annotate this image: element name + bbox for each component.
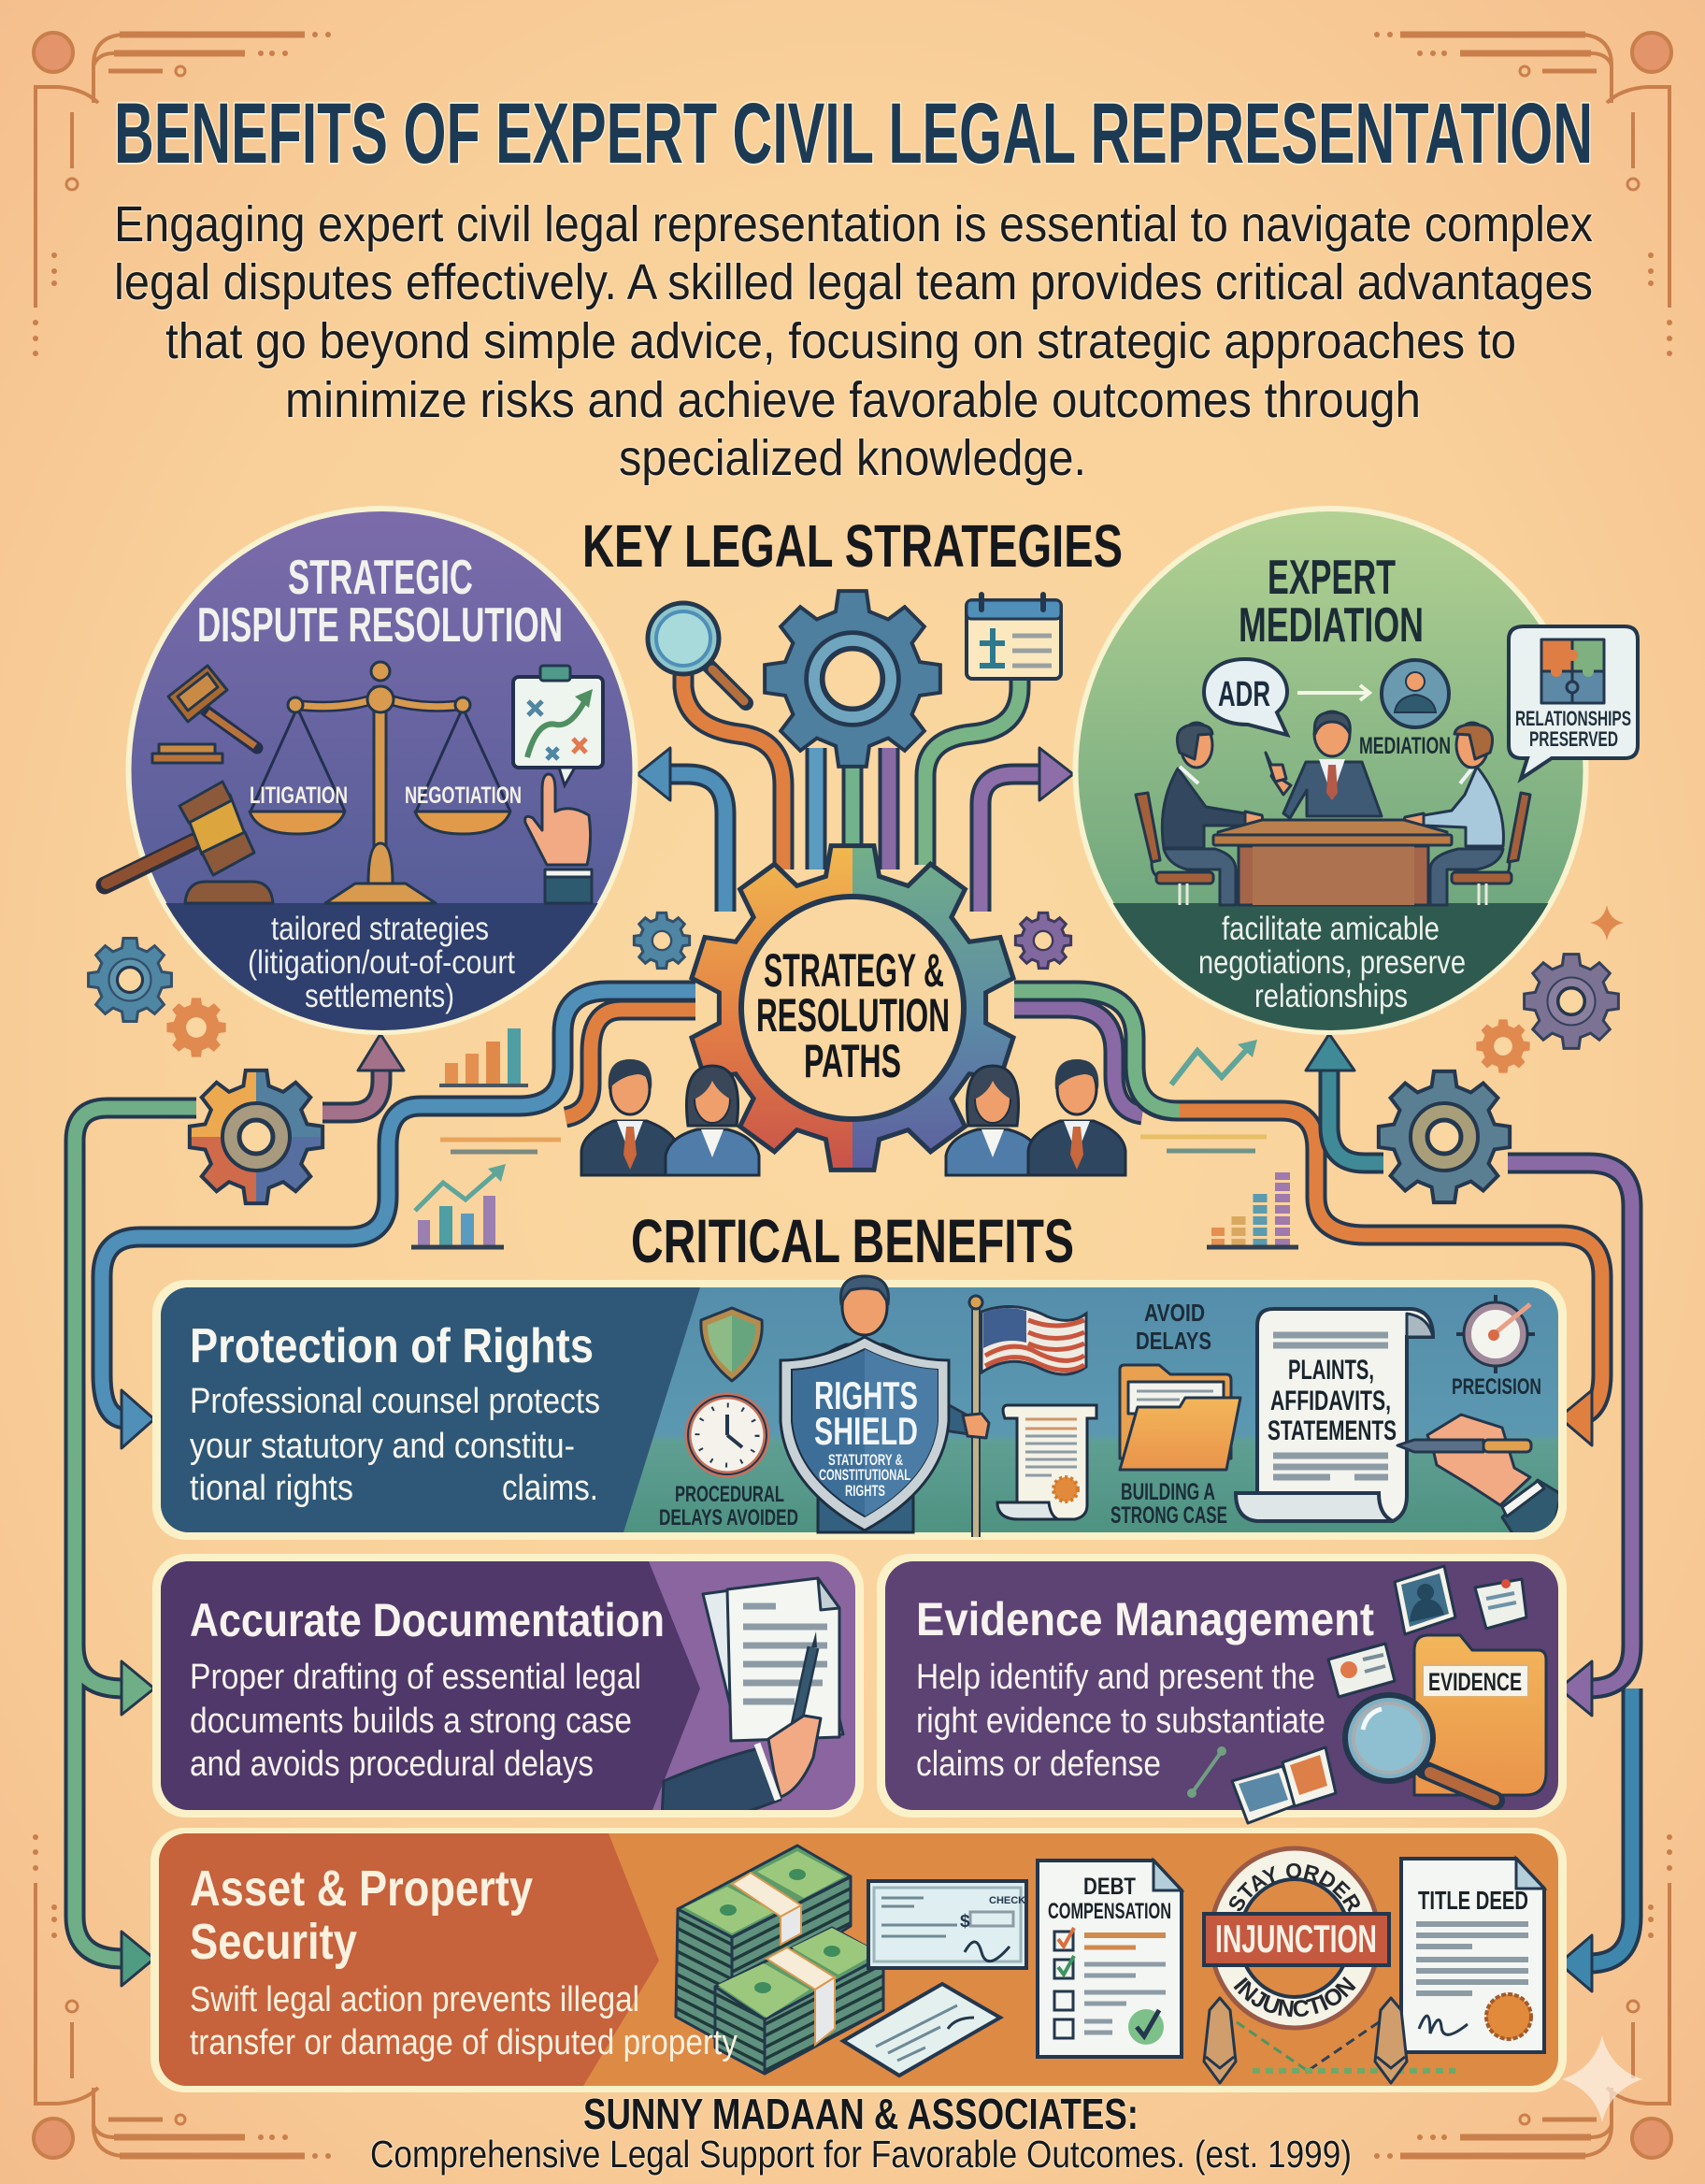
- shield text: STATUTORY &: [828, 1451, 903, 1469]
- panel: accurate documentation: [152, 1554, 864, 1818]
- icon: magnifying glass: [1345, 1695, 1496, 1801]
- left chair: [1136, 793, 1213, 905]
- panel: expert mediation: [1066, 506, 1598, 1039]
- intro paragraph: [114, 196, 1593, 486]
- panel text: claims.: [502, 1469, 598, 1508]
- icon: right pipeline gear: [1379, 1071, 1510, 1202]
- central gear: [682, 832, 1023, 1178]
- icon: left pipeline gear: [187, 1068, 325, 1206]
- icon: flag and hand: [963, 1296, 1086, 1537]
- precision label: PRECISION: [1452, 1374, 1541, 1400]
- icon: magnifier: [648, 603, 746, 703]
- text: left circle caption: (litigation/out-of-court: [248, 944, 515, 981]
- legal team: left pair: [581, 1059, 759, 1175]
- shield text: SHIELD: [814, 1409, 918, 1453]
- icon: trend arrow right: [1171, 1040, 1257, 1085]
- panel text: [190, 1594, 665, 1784]
- back stack: [676, 1846, 851, 2048]
- building a strong case label: [1110, 1479, 1227, 1529]
- icon: boundary markers: [1204, 1998, 1455, 2083]
- panel heading: [190, 1861, 533, 1970]
- panel: asset and property security: [150, 1828, 1567, 2092]
- shield text: RIGHTS: [845, 1482, 885, 1500]
- heading: critical benefits: CRITICAL BENEFITS: [631, 1206, 1074, 1275]
- avoid delays label: [1136, 1299, 1211, 1355]
- avoid delays label: AVOID: [1144, 1299, 1205, 1327]
- lower connector pipes: [75, 991, 1632, 1991]
- icon: writing hand: [1397, 1415, 1561, 1536]
- document scroll: AFFIDAVITS,: [1270, 1386, 1391, 1416]
- panel text: Proper drafting of essential legal: [190, 1658, 641, 1697]
- icon: certificate: [997, 1405, 1096, 1519]
- mediation label: MEDIATION: [1359, 733, 1451, 759]
- panel text: Professional counsel protects: [190, 1382, 600, 1421]
- panel text: [190, 1319, 600, 1508]
- icon: calendar: [967, 595, 1061, 679]
- central gear label: RESOLUTION: [756, 989, 950, 1042]
- text: right circle caption: relationships: [1254, 978, 1408, 1014]
- debt compensation sheet: [1038, 1861, 1182, 2057]
- small bar chart: upper left: [439, 1028, 528, 1085]
- scale labels: NEGOTIATION: [405, 783, 522, 809]
- central gear label: PATHS: [804, 1035, 901, 1087]
- icon: folder: [1120, 1365, 1240, 1470]
- callout: relationships preserved: PRESERVED: [1529, 727, 1618, 751]
- icon group: small gears: [89, 905, 1624, 1073]
- injunction stamp: [1202, 1846, 1391, 2031]
- text: right circle caption: negotiations, preserve: [1198, 944, 1466, 981]
- text: right circle caption: facilitate amicable: [1222, 911, 1440, 947]
- panel text: documents builds a strong case: [190, 1702, 632, 1741]
- circle heading: [1239, 551, 1424, 653]
- text: right circle caption: [1198, 911, 1466, 1014]
- central gear label: STRATEGY &: [764, 944, 944, 997]
- small bar chart: lower right: [1207, 1172, 1298, 1247]
- callout: relationships preserved: RELATIONSHIPS: [1515, 707, 1631, 730]
- title deed: TITLE DEED: [1418, 1886, 1528, 1915]
- panel text: Evidence Management: [916, 1593, 1374, 1645]
- panel body text: Swift legal action prevents illegal: [190, 1980, 639, 2019]
- panel text: claims or defense: [916, 1745, 1161, 1784]
- shield text: RIGHTS: [814, 1373, 918, 1417]
- left client: [1162, 723, 1264, 905]
- text: left circle caption: tailored strategies: [271, 911, 489, 947]
- heading: key legal strategies: KEY LEGAL STRATEGIES: [582, 512, 1123, 580]
- panel heading: Asset & Property: [190, 1861, 533, 1917]
- injunction stamp: STAY ORDER: [1229, 1863, 1360, 1912]
- icon: mediator badge: [1382, 660, 1449, 727]
- injunction stamp: INJUNCTION: [1215, 1917, 1377, 1961]
- speech bubble: ADR: [1204, 659, 1287, 735]
- central mediator: [1266, 711, 1382, 818]
- callout: relationships preserved: [1509, 626, 1638, 779]
- panel text: your statutory and constitu-: [190, 1427, 575, 1466]
- icon: large gavel overlapping rim: [105, 782, 273, 903]
- upper connector pipes: [638, 675, 1073, 912]
- motion streaks: [440, 1137, 1267, 1152]
- footer: [370, 2090, 1352, 2176]
- icon: scales of justice: [250, 662, 510, 903]
- intro paragraph: that go beyond simple advice, focusing on strategic approaches to: [165, 313, 1516, 369]
- icon: top gear: [765, 591, 940, 767]
- intro paragraph: minimize risks and achieve favorable outcomes through: [285, 372, 1421, 428]
- debt compensation sheet: DEBT: [1083, 1874, 1136, 1900]
- speech bubble: ADR: ADR: [1218, 675, 1270, 714]
- avoid delays label: DELAYS: [1136, 1327, 1211, 1355]
- panel text: Help identify and present the: [916, 1658, 1315, 1697]
- building a strong case label: STRONG CASE: [1110, 1502, 1227, 1529]
- document scroll: STATEMENTS: [1268, 1415, 1397, 1446]
- panel text: Protection of Rights: [190, 1319, 594, 1373]
- icon: precision gauge: [1456, 1295, 1535, 1373]
- watermark sparkle: [1562, 2035, 1642, 2122]
- document scroll: PLAINTS,: [1288, 1355, 1374, 1386]
- arrow: [1297, 685, 1369, 700]
- document scroll: [1236, 1309, 1433, 1521]
- icon: snapshots: [1187, 1746, 1336, 1823]
- icon: evidence folder: [1414, 1635, 1546, 1795]
- footer: Comprehensive Legal Support for Favorable Outcomes. (est. 1999): [370, 2133, 1352, 2176]
- circle heading: DISPUTE RESOLUTION: [197, 598, 563, 653]
- icon: bank check: CHECK: [989, 1895, 1025, 1906]
- right chair: [1452, 793, 1530, 905]
- front stack: [715, 1928, 883, 2074]
- panel body text: transfer or damage of disputed property: [190, 2023, 738, 2062]
- icon: clock: [688, 1396, 767, 1474]
- icon: bank check: $: [960, 1912, 970, 1932]
- panel text: [916, 1593, 1374, 1784]
- icon: documents with pen and hand: [662, 1578, 843, 1818]
- intro paragraph: specialized knowledge.: [619, 430, 1086, 486]
- icon: evidence photos and notes: [1328, 1566, 1526, 1697]
- icon: evidence folder: EVIDENCE: [1428, 1668, 1522, 1696]
- intro paragraph: legal disputes effectively. A skilled legal team provides critical advantages: [114, 254, 1593, 310]
- procedural delays label: PROCEDURAL: [675, 1482, 784, 1507]
- panel text: right evidence to substantiate: [916, 1702, 1325, 1741]
- line and bar chart: lower left: [411, 1164, 506, 1247]
- title deed: [1401, 1859, 1544, 2052]
- shield text: CONSTITUTIONAL: [819, 1466, 910, 1484]
- procedural delays label: DELAYS AVOIDED: [659, 1505, 798, 1530]
- footer: SUNNY MADAAN & ASSOCIATES:: [583, 2090, 1139, 2138]
- meeting table: [1213, 820, 1452, 905]
- icon: bank check: [868, 1881, 1026, 1968]
- text: left circle caption: [248, 911, 515, 1014]
- panel text: Accurate Documentation: [190, 1594, 665, 1646]
- panel text: tional rights: [190, 1469, 353, 1508]
- circle heading: MEDIATION: [1239, 598, 1424, 653]
- right client: [1402, 723, 1503, 905]
- icon: tilted check: [843, 1984, 1000, 2076]
- panel: protection of rights: [152, 1276, 1567, 1540]
- scale labels: LITIGATION: [250, 783, 348, 809]
- procedural delays label: [659, 1482, 798, 1530]
- icon: clipboard plan: [513, 666, 603, 785]
- injunction stamp: INJUNCTION: [1234, 1976, 1355, 2018]
- central gear label: [756, 944, 950, 1087]
- icon: money stacks: [676, 1846, 883, 2074]
- circle heading: STRATEGIC: [288, 551, 473, 605]
- figure with rights shield: [781, 1276, 969, 1532]
- building a strong case label: BUILDING A: [1121, 1479, 1215, 1505]
- panel heading: Security: [190, 1914, 357, 1970]
- circle heading: [197, 551, 563, 653]
- scale labels: [250, 783, 522, 809]
- panel body text: [190, 1980, 738, 2062]
- icon: pointing hand: [525, 774, 592, 903]
- legal team: right pair: [946, 1059, 1125, 1175]
- text: left circle caption: settlements): [305, 978, 454, 1014]
- icon: small shield: [701, 1308, 762, 1381]
- shield text: [814, 1373, 918, 1500]
- panel: strategic dispute resolution: [122, 506, 645, 1039]
- icon: upper gavel: [152, 666, 257, 763]
- panel text: and avoids procedural delays: [190, 1745, 594, 1784]
- mediators at table: [1136, 711, 1530, 905]
- debt compensation sheet: COMPENSATION: [1048, 1899, 1171, 1924]
- panel: evidence management: [877, 1554, 1567, 1823]
- circle heading: EXPERT: [1268, 551, 1396, 605]
